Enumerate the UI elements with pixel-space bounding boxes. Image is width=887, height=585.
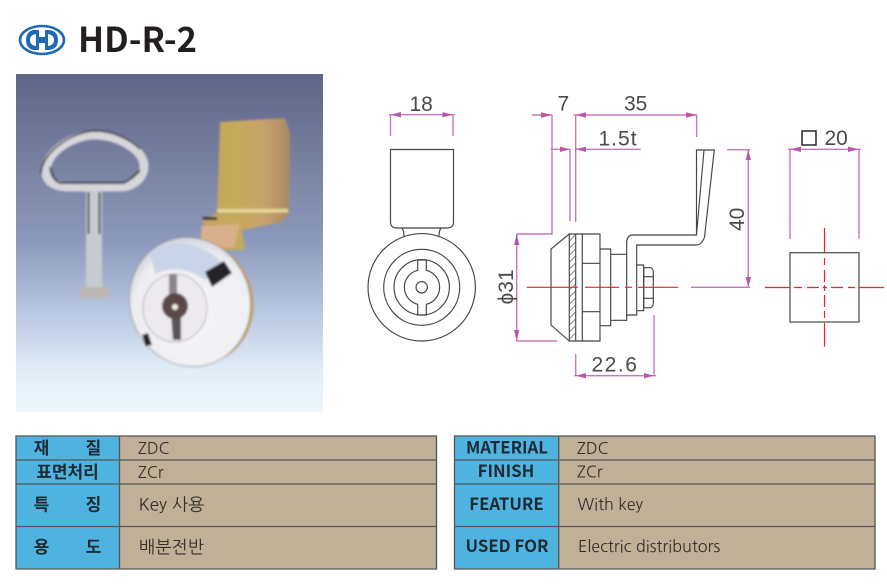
dimension: square 20 <box>788 127 861 239</box>
row: usage: 배분전반 <box>139 538 204 556</box>
row: used for <box>466 533 720 557</box>
dimension: 22.6: 22.6 <box>592 354 638 377</box>
row: used for: Electric distributors <box>578 539 720 555</box>
row: finish <box>478 458 603 482</box>
row: finish: FINISH <box>478 458 534 482</box>
photo: lock body <box>113 222 270 382</box>
side view centerline <box>527 286 678 288</box>
product photo <box>16 74 323 412</box>
photo: key <box>41 131 144 298</box>
dimension: 18: 18 <box>410 93 433 116</box>
row: feature: FEATURE <box>469 491 544 515</box>
dimension: square 20: 20 <box>824 127 848 150</box>
row: feature: 징 <box>86 490 101 516</box>
row: finish: ZCr <box>577 464 603 480</box>
dimension: 40 <box>691 150 751 287</box>
logo <box>20 26 64 54</box>
row: material: 질 <box>86 434 101 459</box>
dimension: 40: 40 <box>726 208 749 231</box>
row: usage: 용 <box>34 533 49 558</box>
row: feature: With key <box>578 497 644 513</box>
dimension: 35 <box>574 93 697 222</box>
dimension: 7: 7 <box>558 93 569 116</box>
row: finish <box>36 458 164 483</box>
dimension: 22.6 <box>574 315 656 378</box>
row: finish: 표면처리 <box>36 458 99 483</box>
row: material: ZDC <box>138 441 169 457</box>
row: finish: ZCr <box>138 465 164 481</box>
dimension: 1.5t: 1.5t <box>598 128 638 151</box>
row: feature <box>34 490 204 516</box>
drawing: side view <box>551 150 714 341</box>
table: English specifications <box>454 434 875 569</box>
dimension: 1.5t <box>551 128 641 221</box>
dimension: diameter 31: ϕ31 <box>495 269 518 304</box>
drawing: front view <box>368 150 475 341</box>
row: usage <box>34 533 204 558</box>
dimension: 7 <box>532 93 569 235</box>
row: material: 재 <box>34 434 49 459</box>
row: feature <box>469 491 644 515</box>
title: HD-R-2 <box>78 12 197 62</box>
dimension: 18 <box>389 93 455 136</box>
row: feature: 특 <box>34 490 49 516</box>
dimension: diameter 31 <box>495 234 557 341</box>
row: feature: Key 사용 <box>138 496 204 514</box>
row: material <box>466 434 608 458</box>
photo: brass lever <box>203 118 290 250</box>
table: Korean specifications <box>16 434 436 569</box>
row: material <box>34 434 169 459</box>
row: used for: USED FOR <box>466 533 549 557</box>
row: material: ZDC <box>577 441 608 457</box>
dimension: 35: 35 <box>624 93 647 116</box>
row: material: MATERIAL <box>466 434 548 458</box>
row: usage: 도 <box>86 533 101 558</box>
drawing: square end view <box>765 228 884 347</box>
